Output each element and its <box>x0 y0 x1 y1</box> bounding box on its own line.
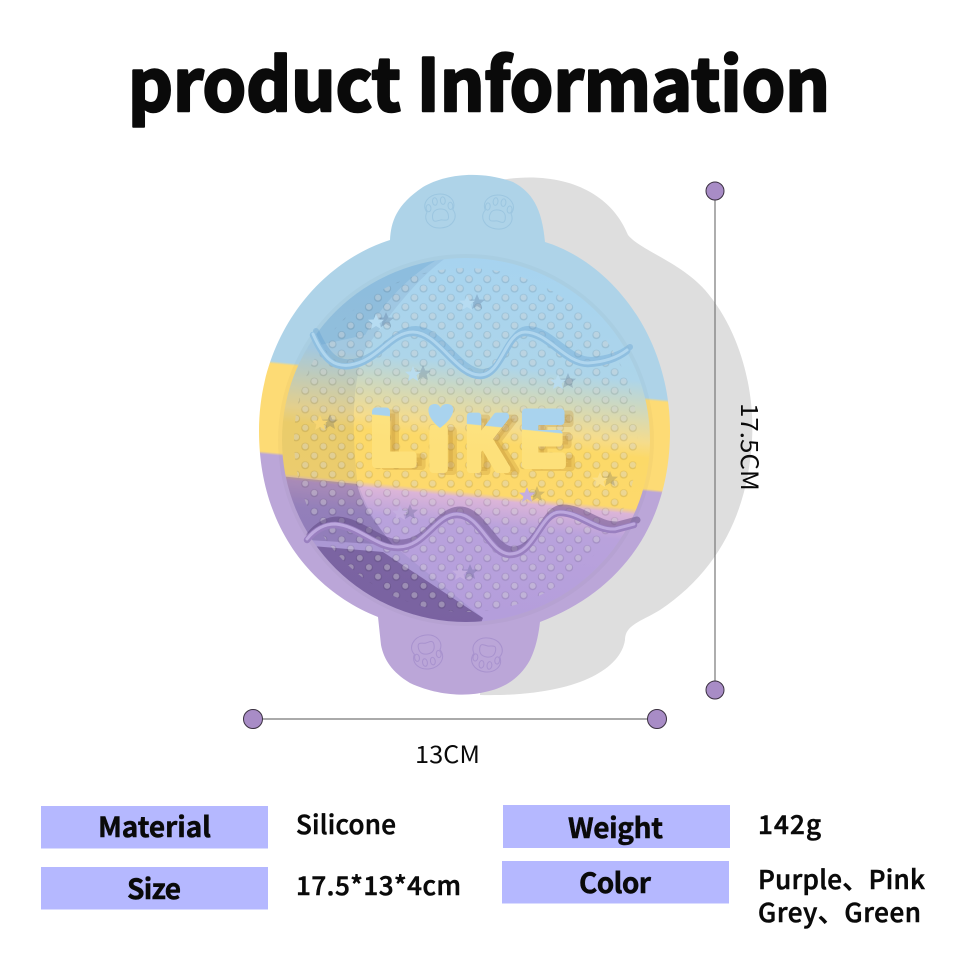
upper wave ridge <box>313 329 630 376</box>
paw prints bottom tab <box>410 633 504 674</box>
spec: size <box>41 866 461 910</box>
dark shadow above lower wave <box>280 476 393 545</box>
spec: material: Silicone <box>296 805 396 842</box>
spec: weight <box>503 805 821 848</box>
spec: color <box>502 860 925 930</box>
LIKE raised text: K <box>475 403 517 488</box>
spec: size: Size <box>127 868 181 908</box>
vertical dimension line <box>706 182 724 699</box>
spec: material: Material <box>98 806 211 846</box>
mat body with tabs <box>259 175 670 695</box>
star decorations <box>312 294 618 580</box>
rim wall <box>278 254 654 626</box>
spec: weight: 142g <box>758 805 821 842</box>
dot texture <box>294 268 638 612</box>
floor shadow left <box>282 260 480 616</box>
spec: color: Color <box>579 862 652 902</box>
product shadow <box>480 177 752 695</box>
product: rainbow silicone lick mat <box>259 175 670 695</box>
width label: 13CM <box>415 735 480 770</box>
inner floor <box>270 250 660 630</box>
LIKE raised text: ı <box>428 401 449 486</box>
spec: color: Purple、Pink <box>758 860 925 897</box>
LIKE raised text: L <box>371 396 415 481</box>
horizontal dimension line <box>244 710 666 728</box>
spec: weight: Weight <box>568 807 663 847</box>
spec: size: 17.5*13*4cm <box>296 866 461 903</box>
LIKE raised text: E <box>521 397 565 482</box>
LIKE raised text: ı <box>437 403 458 488</box>
paw prints top tab <box>423 193 515 231</box>
LIKE raised text: L <box>380 398 424 483</box>
spec: color: Grey、Green <box>758 893 921 930</box>
heart dot <box>428 404 453 428</box>
LIKE raised text: E <box>530 399 574 484</box>
dark shadow lower left <box>317 546 483 622</box>
LIKE raised text: K <box>466 401 508 486</box>
title: product Information <box>128 27 830 132</box>
spec: material <box>41 805 396 848</box>
LIKE raised text <box>371 396 574 488</box>
height label: 17.5CM <box>734 403 769 491</box>
top shadow crescent <box>316 260 436 344</box>
lower wave ridge <box>307 508 637 555</box>
